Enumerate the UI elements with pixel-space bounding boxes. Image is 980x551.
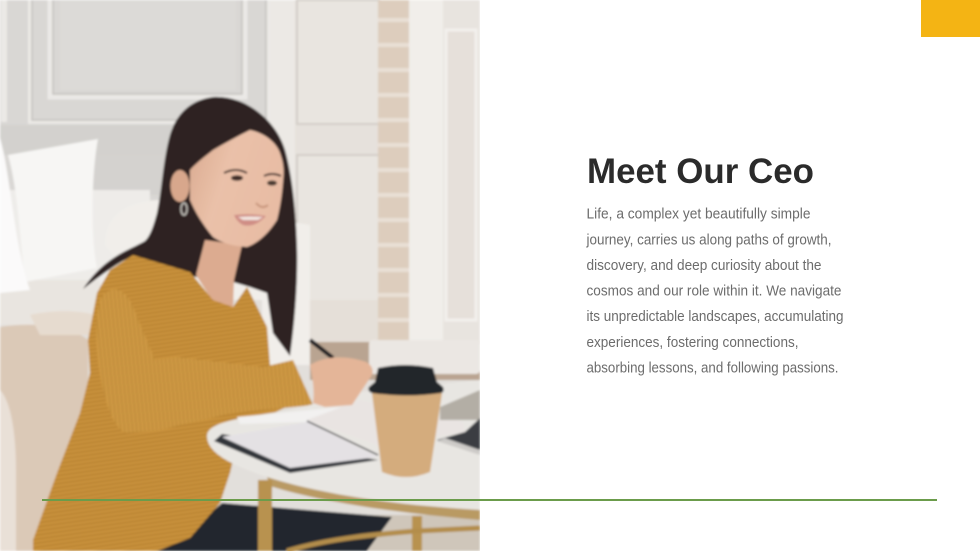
body text: its unpredictable landscapes, accumulating bbox=[586, 309, 844, 325]
body text: journey, carries us along paths of growth, bbox=[586, 232, 832, 248]
hair bbox=[83, 97, 297, 356]
body text: discovery, and deep curiosity about the bbox=[586, 258, 822, 274]
laptop bbox=[437, 390, 480, 455]
sweater arm bbox=[96, 289, 313, 433]
brick column bbox=[378, 0, 412, 342]
body text: experiences, fostering connections, bbox=[586, 335, 798, 351]
pants bbox=[150, 503, 392, 551]
body text: absorbing lessons, and following passions. bbox=[586, 360, 838, 376]
wall background bbox=[0, 0, 480, 551]
body text bbox=[586, 206, 844, 376]
neck bbox=[196, 240, 242, 308]
green divider line bbox=[42, 499, 937, 501]
heading: Meet Our Ceo bbox=[587, 151, 814, 191]
body text: cosmos and our role within it. We navigate bbox=[586, 284, 842, 300]
sofa and pillows bbox=[0, 138, 310, 551]
coffee cup bbox=[368, 365, 444, 477]
face bbox=[190, 130, 284, 247]
photo: CEO at her desk bbox=[0, 0, 480, 551]
hand bbox=[310, 357, 373, 407]
paper and open pages bbox=[236, 408, 334, 424]
body text: Life, a complex yet beautifully simple bbox=[586, 206, 810, 222]
sweater bbox=[33, 255, 300, 551]
table bbox=[205, 403, 480, 551]
yellow corner block bbox=[921, 0, 980, 37]
facial features bbox=[224, 170, 281, 226]
ear and earring bbox=[170, 170, 190, 215]
white door frame bbox=[310, 0, 480, 380]
notebook bbox=[214, 421, 378, 473]
pen bbox=[310, 340, 333, 358]
floor bbox=[360, 515, 480, 551]
